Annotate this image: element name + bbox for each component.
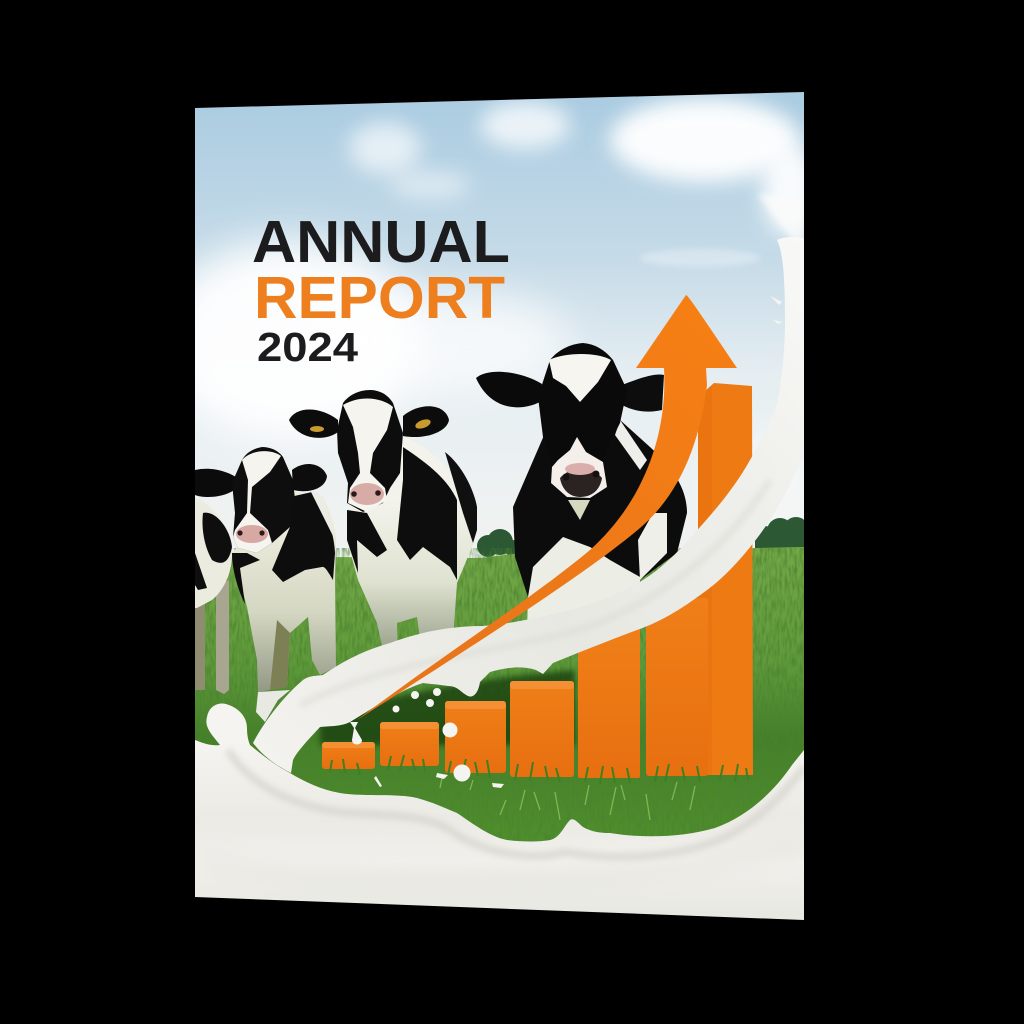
muzzle (236, 525, 268, 543)
milk wisp at top right (758, 195, 804, 240)
bar 2 (380, 722, 439, 766)
head (538, 343, 624, 438)
blaze (343, 398, 393, 512)
head (337, 390, 403, 512)
book cover (160, 88, 820, 930)
bar 5 (578, 628, 640, 778)
cow: small, second from left (195, 447, 336, 722)
ears (476, 372, 542, 407)
bar 6 (646, 598, 708, 776)
grass texture (190, 548, 810, 848)
body (232, 490, 336, 692)
bar 3 (445, 701, 506, 773)
chest white (527, 537, 640, 625)
meadow (190, 547, 810, 850)
bar 1 (322, 742, 375, 769)
flank white (638, 513, 667, 580)
shoulder stripe (615, 420, 647, 470)
milk droplets (350, 296, 783, 788)
head (232, 447, 295, 553)
sky (190, 88, 810, 568)
tall bar (698, 383, 753, 775)
soft fold near base (200, 845, 804, 880)
bar 4 (510, 681, 574, 777)
ribbon inner fold shading (300, 480, 770, 705)
annual report cover mockup (195, 92, 804, 920)
ears (289, 410, 338, 438)
title: Annual Report 2024: REPORT (254, 265, 505, 331)
body (347, 437, 475, 660)
cow: middle (289, 390, 477, 660)
title: Annual Report 2024: 2024 (257, 324, 358, 370)
growth arrow (357, 295, 737, 720)
poll and blaze (549, 354, 611, 402)
hoof splash (256, 690, 290, 722)
shoulder patch (347, 510, 387, 573)
cow: far left, cropped (195, 498, 232, 694)
black side patch (397, 447, 457, 580)
wave crest shading (228, 750, 804, 857)
blaze (233, 451, 281, 553)
bar chart (322, 383, 753, 778)
foreground grass blades (330, 755, 748, 784)
left chest strip (232, 553, 260, 604)
chest patch (568, 500, 590, 520)
title: Annual Report 2024 (252, 209, 510, 370)
milk ribbon (253, 237, 810, 773)
rear stripe (445, 452, 477, 543)
ears (195, 469, 236, 497)
treeline (477, 517, 809, 557)
muzzle (350, 483, 384, 505)
rear leg shade (270, 620, 290, 690)
milk wave at bottom (190, 704, 810, 930)
grass shadow around chart (320, 670, 575, 745)
black side patch (272, 492, 335, 582)
title: Annual Report 2024: ANNUAL (252, 209, 510, 275)
muzzle (560, 469, 602, 497)
clouds (160, 98, 820, 530)
cow: large, right (476, 343, 687, 625)
body (513, 420, 687, 625)
